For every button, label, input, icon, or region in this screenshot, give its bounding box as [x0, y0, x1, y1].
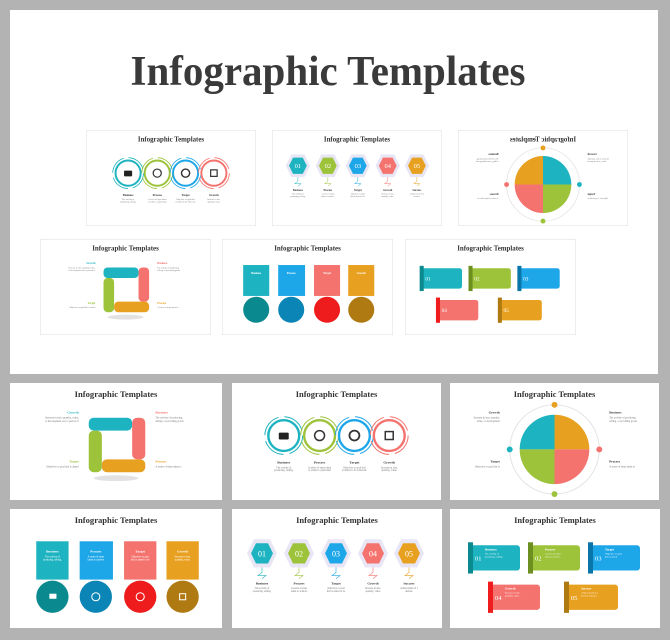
slide: banners: Target [135, 549, 146, 553]
thumbnail: hexagons: Success [412, 189, 421, 192]
slide: hexagons: taken to achieve [291, 590, 308, 593]
slide: hexagons: quantity, value. [365, 590, 381, 593]
thumbnail: puzzle mirrored [458, 130, 628, 226]
slide: puzzle: value, or development [477, 420, 500, 423]
thumbnail: hexagons: taken to achieve [321, 196, 334, 198]
slide: numbered tabs [450, 509, 660, 628]
slide: numbered tabs: Objective or goal [605, 552, 622, 555]
thumbnail: square loop: Objective or goal that is aimed [69, 306, 96, 309]
slide: numbered tabs: Infographic Templates [514, 515, 597, 525]
slide: numbered tabs: 04 [495, 595, 502, 602]
slide: puzzle: selling, or providing goods [609, 420, 637, 423]
slide: square loop: The activity of producing, [155, 417, 183, 420]
thumbnail: hexagons: 01 [295, 163, 301, 170]
slide: banners [10, 509, 222, 628]
thumbnail: puzzle mirrored: A series of steps taken to [477, 197, 498, 200]
thumbnail: numbered tabs: 02 [474, 276, 480, 282]
slide: numbered tabs: 03 [595, 555, 601, 562]
slide: numbered tabs: 02 [535, 555, 541, 562]
slide: square loop: selling, or providing goods [155, 420, 184, 423]
thumbnail: numbered tabs: 01 [425, 276, 431, 282]
slide: banners: Business [46, 549, 59, 553]
slide: circles: A series of steps taken [308, 466, 332, 469]
thumbnail: banners: Process [287, 272, 296, 275]
thumbnail: circles: Target [182, 193, 190, 197]
slide: numbered tabs: quantity, value. [505, 595, 520, 598]
thumbnail: banners [222, 239, 393, 335]
slide: hexagons: that is aimed to be [327, 590, 346, 593]
thumbnail: puzzle mirrored: selling, or providing goods [476, 160, 498, 163]
slide: puzzle: Objective or goal that is [475, 465, 500, 468]
slide: numbered tabs: Target [605, 547, 615, 551]
thumbnail: circles: producing, selling. [120, 200, 136, 203]
thumbnail: hexagons: Business [293, 189, 303, 192]
thumbnail: hexagons: desired. [414, 196, 421, 198]
thumbnail: puzzle mirrored: Business [488, 153, 498, 156]
slide: square loop: or development over a period of [45, 420, 79, 423]
thumbnail: square loop: Increase in size, quantity, value, [68, 266, 96, 269]
slide: square loop: Business [155, 411, 169, 415]
thumbnail: numbered tabs: 04 [442, 308, 447, 314]
slide: hexagons: 05 [405, 549, 413, 558]
slide: puzzle: Target [490, 459, 501, 463]
slide: hexagons: Growth [367, 582, 379, 586]
thumbnail: hexagons: A series of steps [321, 193, 335, 196]
slide: banners: Growth [177, 549, 188, 553]
thumbnail: hexagons: Increase in size, [381, 194, 395, 196]
slide: circles: Business [277, 460, 291, 464]
slide: puzzle: Infographic Templates [514, 389, 596, 399]
thumbnail: puzzle mirrored: Increase in size, quantity, [587, 157, 609, 160]
slide: hexagons: The activity of [255, 587, 269, 590]
slide: puzzle [450, 383, 659, 500]
slide: hexagons: Success [404, 582, 415, 586]
slide: hexagons: desired. [405, 590, 413, 593]
thumbnail: square loop: Target [88, 302, 95, 305]
thumbnail: circles: A series of steps taken [148, 198, 168, 201]
thumbnail: hexagons: producing, selling. [290, 195, 306, 198]
slide: square loop: Process [155, 459, 167, 463]
slide: numbered tabs: 01 [475, 555, 481, 562]
slide: numbered tabs: taken to achieve [545, 555, 561, 558]
slide: hexagons: producing, selling. [253, 590, 272, 593]
slide: numbered tabs: The activity of [485, 552, 499, 555]
slide: circles: Increase in size, [381, 466, 398, 469]
slide: banners: quantity, value. [175, 558, 191, 561]
slide: numbered tabs: Growth [505, 587, 516, 591]
thumbnail: hexagons: that is aimed to be [350, 196, 365, 198]
slide: numbered tabs: Achievement of a [581, 592, 599, 595]
slide: hexagons: Increase in size, [365, 587, 381, 590]
thumbnail: hexagons: 04 [385, 163, 392, 170]
thumbnail: puzzle mirrored: Objective or goal that is [587, 197, 608, 200]
thumbnail: puzzle mirrored: Target [587, 193, 595, 196]
slide: hexagons: A series of steps [291, 587, 307, 590]
thumbnail: square loop: or development over a period of [68, 269, 96, 272]
slide: numbered tabs: Process [545, 547, 556, 551]
thumbnail: circles: Increase in size, [207, 199, 221, 201]
thumbnail: circles: Growth [209, 193, 219, 197]
thumbnail: puzzle mirrored: The activity of producing, [476, 157, 498, 160]
thumbnail: square loop [40, 239, 211, 335]
slide: square loop: Objective or goal that is aimed [46, 465, 79, 468]
thumbnail: numbered tabs: 03 [523, 276, 529, 282]
slide: hexagons: 02 [295, 549, 303, 558]
slide: banners: A series of steps [88, 555, 104, 558]
slide: circles: Target [349, 460, 360, 464]
thumbnail: square loop: Business [157, 262, 167, 265]
slide: hexagons: Objective or goal [327, 587, 345, 590]
slide: hexagons: 01 [258, 549, 266, 558]
slide: square loop [10, 383, 222, 500]
slide: banners: that is aimed to be [131, 558, 150, 561]
slide: square loop: Target [69, 459, 80, 463]
slide: circles: producing, selling. [274, 469, 294, 472]
slide: square loop: Infographic Templates [75, 389, 158, 399]
slide: circles [232, 383, 441, 500]
thumbnail: hexagons: Process [323, 189, 332, 192]
slide: numbered tabs: producing, selling. [485, 555, 503, 558]
slide: puzzle: Process [609, 459, 621, 463]
thumbnail: banners: Target [323, 272, 331, 275]
thumbnail: hexagons: quantity, value. [382, 195, 394, 198]
thumbnail: circles: Process [153, 193, 163, 197]
thumbnail: puzzle mirrored: Process [490, 193, 498, 196]
thumbnail: square loop: Infographic Templates [92, 245, 159, 252]
slide: numbered tabs: Success [581, 587, 592, 591]
thumbnail: hexagons: Objective or goal [351, 193, 365, 196]
thumbnail: banners: Infographic Templates [274, 245, 341, 252]
slide: numbered tabs: desired outcome. [581, 595, 598, 598]
slide: hexagons: Business [256, 582, 269, 586]
thumbnail: circles: The activity of [122, 198, 135, 201]
thumbnail: numbered tabs: 05 [504, 308, 509, 314]
thumbnail: hexagons [272, 130, 442, 226]
slide: circles: Growth [383, 460, 395, 464]
thumbnail: square loop: Growth [86, 262, 96, 265]
slide: circles: Process [314, 460, 326, 464]
slide: hexagons: 04 [369, 549, 377, 558]
slide: hexagons: Achievement of a [400, 587, 419, 590]
slide: circles: Objective or goal that [343, 466, 366, 469]
thumbnail: square loop: Process [157, 302, 166, 305]
thumbnail: hexagons: Infographic Templates [324, 136, 390, 143]
thumbnail: numbered tabs: Infographic Templates [457, 245, 524, 252]
slide: puzzle: A series of steps taken to [609, 465, 636, 468]
slide: hexagons: Infographic Templates [296, 515, 379, 525]
thumbnail: hexagons: 02 [325, 163, 331, 170]
thumbnail: hexagons: Achievement of a [410, 193, 424, 196]
thumbnail: circles: quantity, value. [207, 200, 221, 203]
slide: puzzle: Growth [489, 411, 500, 415]
slide: banners: taken to achieve [88, 558, 105, 561]
thumbnail: circles [86, 130, 256, 226]
slide: puzzle: The activity of producing, [609, 417, 637, 420]
slide: circles: to achieve a particular [308, 469, 331, 472]
thumbnail: banners: Growth [357, 272, 366, 275]
thumbnail: hexagons: 03 [355, 163, 361, 170]
slide: puzzle: Increase in size, quantity, [474, 417, 500, 420]
slide: circles: is aimed to be achieved. [342, 469, 367, 472]
slide: banners: Infographic Templates [75, 515, 158, 525]
thumbnail: puzzle mirrored: Infographic Templates [510, 136, 576, 143]
slide: square loop: A series of steps taken to [155, 465, 182, 468]
slide: banners: Process [90, 549, 102, 553]
thumbnail: puzzle mirrored: value, or development [587, 161, 606, 163]
slide: circles: The activity of [276, 466, 291, 469]
slide: circles: Infographic Templates [296, 389, 378, 399]
slide: square loop: Increase in size, quantity, value, [45, 417, 79, 420]
slide: numbered tabs: Business [485, 547, 497, 551]
thumbnail: circles: Business [123, 193, 134, 197]
title: Infographic Templates [130, 49, 526, 95]
slide: hexagons: Process [294, 582, 305, 586]
thumbnail: circles: to achieve a particular [148, 201, 167, 203]
thumbnail: square loop: selling, or providing goods [157, 269, 180, 272]
slide: banners: producing, selling. [43, 558, 62, 561]
slide: circles: quantity, value. [381, 469, 398, 472]
thumbnail: puzzle mirrored: Growth [587, 153, 597, 156]
slide: puzzle: Business [609, 411, 622, 415]
slide: numbered tabs: Increase in size, [505, 592, 521, 595]
thumbnail: hexagons: 05 [414, 163, 420, 170]
slide: numbered tabs: 05 [571, 595, 577, 602]
thumbnail: square loop: The activity of producing, [157, 266, 180, 269]
slide: hexagons: Target [331, 582, 342, 586]
slide: banners: The activity of [45, 555, 60, 558]
thumbnail: circles: is aimed to be achieved. [175, 201, 196, 203]
thumbnail: banners: Business [251, 272, 261, 275]
thumbnail: circles: Objective or goal that [176, 198, 195, 201]
slide: square loop: Growth [67, 411, 79, 415]
slide: hexagons: 03 [332, 549, 340, 558]
thumbnail: square loop: A series of steps taken to [157, 306, 178, 309]
slide: banners: Objective or goal [131, 555, 149, 558]
thumbnail: hexagons: Growth [383, 189, 393, 192]
slide: banners: Increase in size, [175, 555, 191, 558]
slide: numbered tabs: A series of steps [545, 552, 561, 555]
thumbnail: circles: Infographic Templates [138, 136, 204, 143]
slide: numbered tabs: that is aimed [605, 555, 618, 558]
thumbnail: numbered tabs [405, 239, 576, 335]
thumbnail: hexagons: The activity of [292, 193, 304, 196]
slide: hexagons [232, 509, 442, 628]
thumbnail: hexagons: Target [354, 189, 362, 192]
